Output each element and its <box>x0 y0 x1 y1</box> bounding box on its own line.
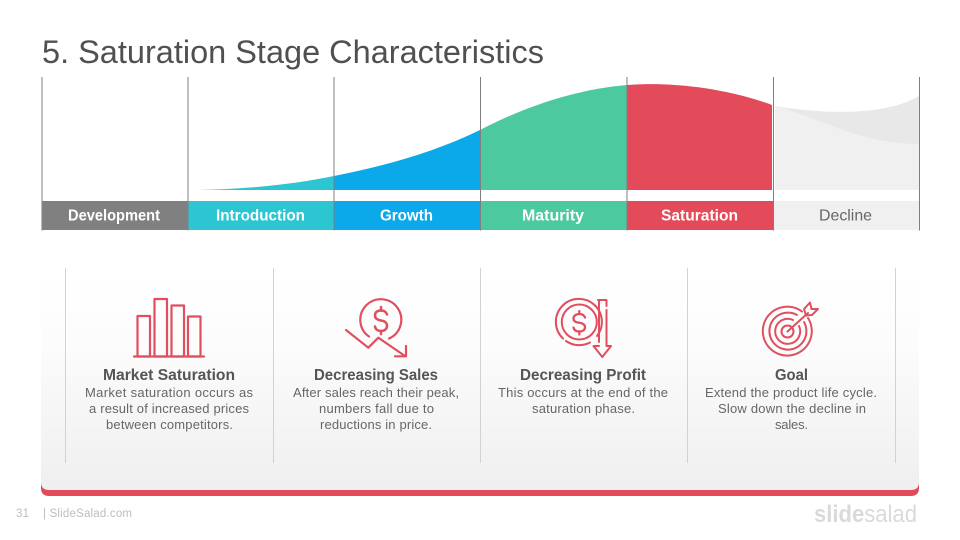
title: 5. Saturation Stage Characteristics <box>42 34 544 70</box>
icon: target with arrow <box>763 302 818 356</box>
chart: product life cycle curve <box>198 84 919 190</box>
footer: page number: 31 <box>16 508 29 520</box>
stage bar: growth <box>334 201 481 230</box>
column: decreasing sales <box>293 299 459 432</box>
icon: coin with down arrow <box>556 299 611 357</box>
text: goal description: Slow down the decline in <box>718 401 866 416</box>
stage bar: development <box>42 201 188 230</box>
panel: saturation characteristics <box>41 268 919 496</box>
text: decreasing profit description <box>498 385 668 416</box>
stage bar: introduction: Introduction <box>216 208 305 224</box>
stage bar: introduction <box>188 201 334 230</box>
column: decreasing profit <box>498 299 668 416</box>
column: market saturation <box>85 299 254 432</box>
text: market saturation description: between competitors. <box>106 417 233 432</box>
text: goal description: sales. <box>775 417 808 432</box>
text: goal description <box>705 385 877 432</box>
stage bar: saturation: Saturation <box>661 208 738 224</box>
stage bar: maturity <box>481 201 627 230</box>
text: decreasing sales description <box>293 385 459 432</box>
heading: decreasing profit: Decreasing Profit <box>520 367 647 384</box>
text: decreasing sales description: numbers fall due to <box>319 401 434 416</box>
curve segment: decline <box>775 96 919 190</box>
icon: bar chart <box>134 299 204 356</box>
text: decreasing sales description: After sales reach their peak, <box>293 385 459 400</box>
curve segment: growth <box>334 130 480 190</box>
column: goal <box>705 302 877 432</box>
icon: falling sales coin <box>346 299 406 356</box>
curve segment: saturation <box>627 84 772 190</box>
footer: site name: | SlideSalad.com <box>43 508 132 520</box>
text: market saturation description: Market saturation occurs as <box>85 385 254 400</box>
stage bar: growth: Growth <box>380 208 433 224</box>
heading: goal: Goal <box>775 367 808 384</box>
text: goal description: Extend the product life cycle. <box>705 385 877 400</box>
text: decreasing sales description: reductions in price. <box>320 417 432 432</box>
heading: decreasing sales: Decreasing Sales <box>314 367 438 384</box>
heading: market saturation: Market Saturation <box>103 367 235 384</box>
stage bar: development: Development <box>68 208 161 224</box>
text: decreasing profit description: saturation phase. <box>532 401 635 416</box>
stage bar: saturation <box>627 201 774 230</box>
logo: slidesalad: slidesalad <box>814 501 917 528</box>
text: market saturation description <box>85 385 254 432</box>
stage bar: decline <box>774 201 920 230</box>
curve segment: introduction <box>198 176 334 190</box>
text: market saturation description: a result of increased prices <box>89 401 250 416</box>
text: decreasing profit description: This occurs at the end of the <box>498 385 668 400</box>
stage bar: maturity: Maturity <box>522 208 584 224</box>
curve segment: maturity <box>480 85 627 190</box>
stage bar: decline: Decline <box>819 208 872 224</box>
